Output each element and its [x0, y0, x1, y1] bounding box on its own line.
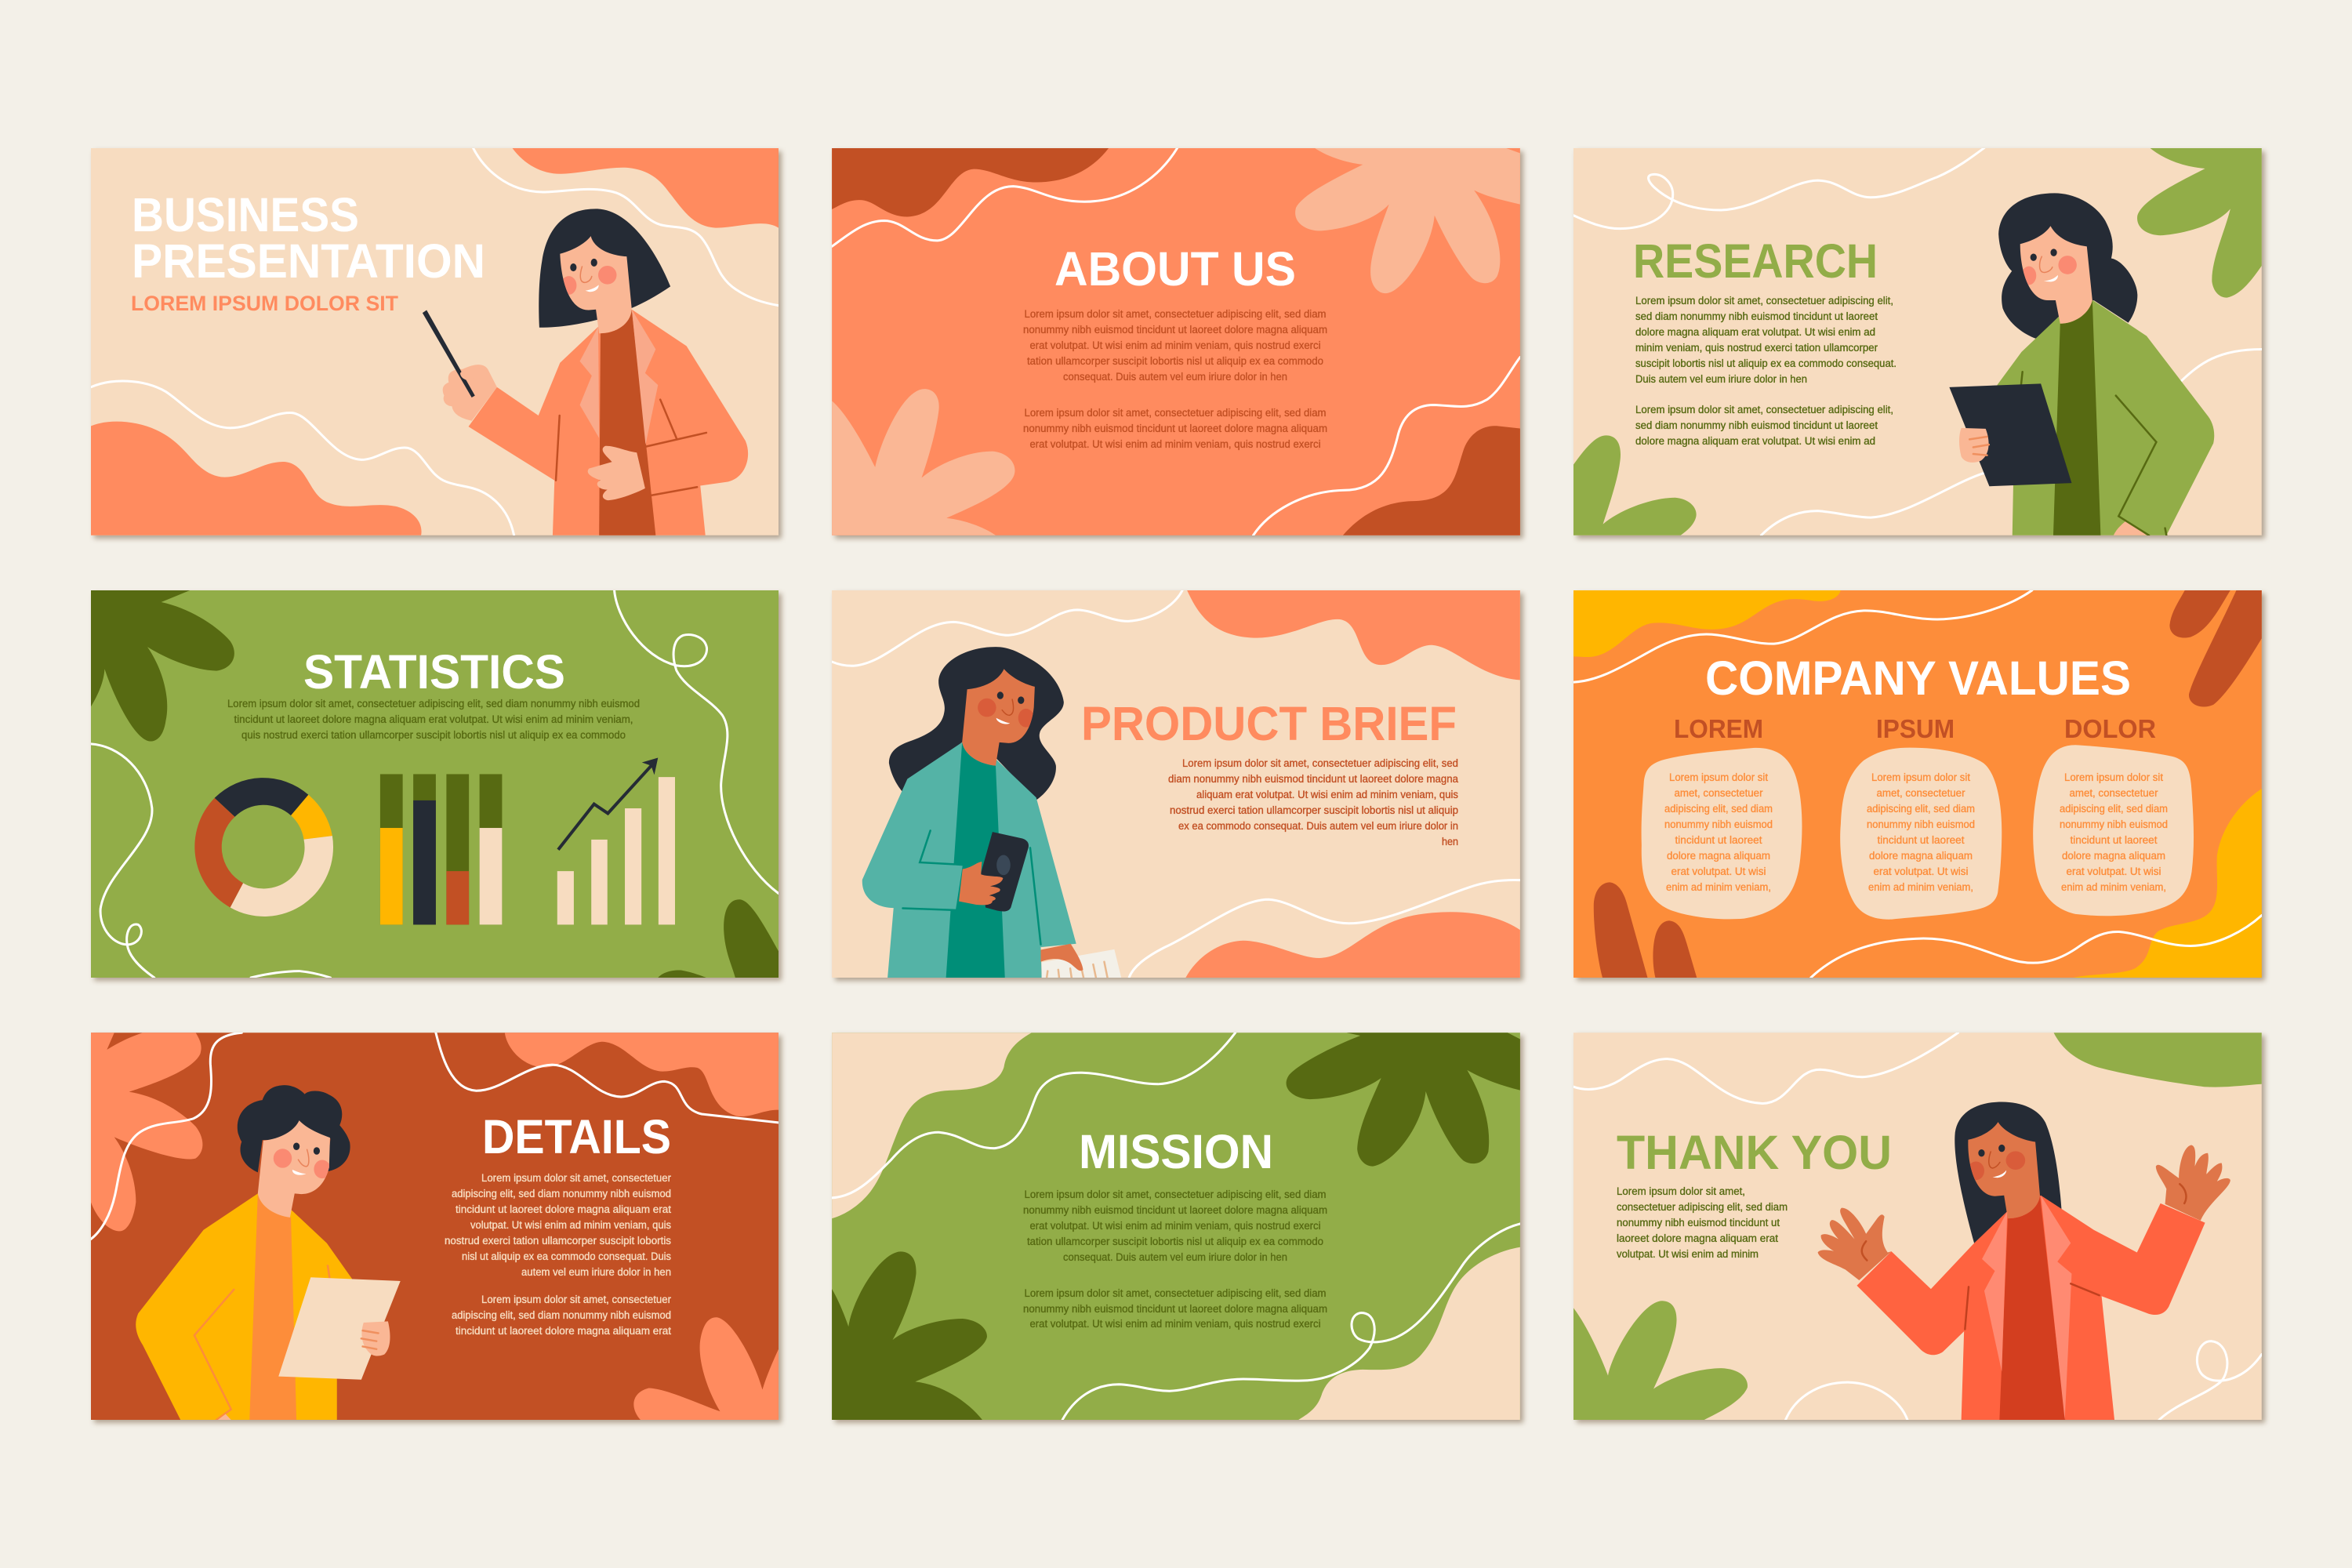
leaves: bottom left: [1594, 882, 1697, 978]
leaf: top left: [91, 590, 234, 742]
body text: diam nonummy nibh euismod tincidunt ut laoreet dolore magna: [1168, 773, 1458, 785]
column text: dolor: tincidunt ut laoreet: [2070, 834, 2158, 846]
title: research: RESEARCH: [1633, 234, 1878, 288]
body text: Lorem ipsum dolor sit amet, consectetuer adipiscing elit,: [1635, 404, 1893, 416]
blob: bottom left: [91, 422, 422, 535]
body text: hen: [1442, 836, 1458, 848]
body text: suscipit lobortis nisl ut aliquip ex ea commodo consequat.: [1635, 358, 1896, 369]
column text: ipsum: amet, consectetuer: [1877, 787, 1965, 799]
leaf: bottom left: [832, 389, 1014, 535]
panel: business presentation: [91, 148, 782, 539]
body text: tincidunt ut laoreet dolore magna aliquam erat: [456, 1325, 671, 1337]
chart: stacked bars: [380, 774, 502, 924]
arrow: upward trend: [558, 757, 658, 850]
body text: volutpat. Ut wisi enim ad minim: [1617, 1248, 1759, 1260]
column headings: [1674, 714, 2156, 743]
body text: [445, 1172, 671, 1337]
panel: product brief: [832, 590, 1523, 981]
title: details: DETAILS: [482, 1110, 671, 1163]
figure: person with paper: [136, 1085, 401, 1420]
body text: consequat. Duis autem vel eum iriure dolor in hen: [1063, 371, 1287, 383]
body text: sed diam nonummy nibh euismod tincidunt ut laoreet: [1635, 419, 1878, 431]
body text: [1617, 1185, 1788, 1260]
leaf: top right: [1287, 1033, 1520, 1167]
body text: Lorem ipsum dolor sit amet, consectetuer adipiscing elit, sed diam: [1024, 407, 1327, 419]
column text: lorem: tincidunt ut laoreet: [1675, 834, 1762, 846]
figure: presenter with pen: [423, 209, 748, 535]
column text: ipsum: tincidunt ut laoreet: [1877, 834, 1965, 846]
leaf: bottom right: [658, 899, 779, 978]
chart: growth bars: [557, 777, 675, 924]
column text: ipsum: [1867, 771, 1975, 893]
figure: woman with clipboard: [1949, 193, 2214, 535]
blob: bottom right: [2073, 789, 2262, 978]
leaf: bottom right: [633, 1317, 779, 1420]
column text: ipsum: erat volutpat. Ut wisi: [1874, 866, 1968, 877]
column text: dolor: dolore magna aliquam: [2062, 850, 2165, 862]
blob: bottom right: [1298, 1247, 1520, 1420]
leaf: top right: [1295, 148, 1520, 293]
panel: about us: [832, 148, 1523, 539]
column text: dolor: amet, consectetuer: [2070, 787, 2158, 799]
panel: statistics: [91, 590, 782, 981]
panel: research: [1573, 148, 2265, 539]
column text: lorem: amet, consectetuer: [1675, 787, 1763, 799]
column text: dolor: [2060, 771, 2168, 893]
title: mission: MISSION: [1079, 1125, 1273, 1178]
card: lorem background: [1642, 748, 1802, 919]
leaf: bottom left: [1573, 1301, 1748, 1420]
body text: erat volutpat. Ut wisi enim ad minim veniam, quis nostrud exerci: [1030, 1220, 1320, 1232]
body text: autem vel eum iriure dolor in hen: [521, 1266, 671, 1278]
body text: nisl ut aliquip ex ea commodo consequat. Duis: [462, 1250, 671, 1262]
body text: volutpat. Ut wisi enim ad minim veniam, quis: [470, 1219, 671, 1231]
body text: dolore magna aliquam erat volutpat. Ut wisi enim ad: [1635, 326, 1875, 338]
title: company values: COMPANY VALUES: [1705, 652, 2131, 705]
body text: ex ea commodo consequat. Duis autem vel eum iriure dolor in: [1178, 820, 1458, 832]
body text: consequat. Duis autem vel eum iriure dolor in hen: [1063, 1251, 1287, 1263]
column headings: LOREM: [1674, 714, 1763, 743]
leaf: top left: [91, 1033, 202, 1231]
body text: nonummy nibh euismod tincidunt ut laoreet dolore magna aliquam: [1023, 423, 1327, 434]
body text: tincidunt ut laoreet dolore magna aliquam erat: [456, 1203, 671, 1215]
body text: Lorem ipsum dolor sit amet, consectetuer adipiscing elit, sed: [1182, 757, 1458, 769]
body text: Lorem ipsum dolor sit amet,: [1617, 1185, 1745, 1197]
body text: Lorem ipsum dolor sit amet, consectetuer adipiscing elit, sed diam: [1024, 1287, 1327, 1299]
body text: [1168, 757, 1458, 848]
body text: Duis autem vel eum iriure dolor in hen: [1635, 373, 1807, 385]
column text: ipsum: enim ad minim veniam,: [1868, 881, 1973, 893]
blob: top left: [832, 148, 1109, 216]
card: dolor background: [2033, 745, 2194, 916]
column text: lorem: erat volutpat. Ut wisi: [1671, 866, 1766, 877]
body text: [227, 698, 640, 741]
column text: lorem: enim ad minim veniam,: [1666, 881, 1771, 893]
body text: nostrud exerci tation ullamcorper suscipit lobortis: [445, 1235, 671, 1247]
body text: adipiscing elit, sed diam nonummy nibh euismod: [452, 1309, 671, 1321]
body text: laoreet dolore magna aliquam erat: [1617, 1232, 1778, 1244]
chart: donut: [194, 778, 333, 916]
column text: ipsum: Lorem ipsum dolor sit: [1871, 771, 1970, 783]
body text: sed diam nonummy nibh euismod tincidunt ut laoreet: [1635, 310, 1878, 322]
body text: Lorem ipsum dolor sit amet, consectetuer: [481, 1294, 671, 1305]
figure: woman with phone: [862, 647, 1121, 978]
body text: adipiscing elit, sed diam nonummy nibh euismod: [452, 1188, 671, 1200]
column text: dolor: nonummy nibh euismod: [2060, 818, 2168, 830]
body text: erat volutpat. Ut wisi enim ad minim veniam, quis nostrud exerci: [1030, 1318, 1320, 1330]
title: business presentation: [135, 198, 483, 278]
leaf: bottom left: [832, 1251, 987, 1420]
body text: tincidunt ut laoreet dolore magna aliquam erat volutpat. Ut wisi enim ad minim veniam,: [234, 713, 633, 725]
column text: lorem: [1664, 771, 1773, 893]
column text: lorem: dolore magna aliquam: [1667, 850, 1770, 862]
column text: lorem: adipiscing elit, sed diam: [1664, 803, 1773, 815]
column text: ipsum: nonummy nibh euismod: [1867, 818, 1975, 830]
column text: dolor: Lorem ipsum dolor sit: [2064, 771, 2163, 783]
leaves: top right: [2169, 590, 2262, 707]
title: business presentation: PRESENTATION: [132, 234, 485, 288]
subtitle: LOREM IPSUM DOLOR SIT: [131, 292, 398, 315]
blob: top right: [1187, 590, 1520, 680]
body text: Lorem ipsum dolor sit amet, consectetuer: [481, 1172, 671, 1184]
body text: Lorem ipsum dolor sit amet, consectetuer adipiscing elit, sed diam: [1024, 308, 1327, 320]
panel: company values: [1573, 590, 2265, 981]
body text: nostrud exerci tation ullamcorper suscipit lobortis nisl ut aliquip: [1170, 804, 1458, 816]
body text: nonummy nibh euismod tincidunt ut laoreet dolore magna aliquam: [1023, 324, 1327, 336]
body text: Lorem ipsum dolor sit amet, consectetuer adipiscing elit, sed diam: [1024, 1189, 1327, 1200]
title: business presentation: BUSINESS: [132, 188, 359, 241]
column text: ipsum: dolore magna aliquam: [1869, 850, 1973, 862]
title: about us: ABOUT US: [1054, 242, 1296, 296]
column text: lorem: Lorem ipsum dolor sit: [1669, 771, 1768, 783]
body text: tation ullamcorper suscipit lobortis nisl ut aliquip ex ea commodo: [1027, 1236, 1323, 1247]
body text: nonummy nibh euismod tincidunt ut laoreet dolore magna aliquam: [1023, 1204, 1327, 1216]
column text: dolor: enim ad minim veniam,: [2061, 881, 2166, 893]
body text: tation ullamcorper suscipit lobortis nisl ut aliquip ex ea commodo: [1027, 355, 1323, 367]
body text: consectetuer adipiscing elit, sed diam: [1617, 1201, 1788, 1213]
panel: mission: [832, 1033, 1523, 1423]
body text: [1635, 295, 1896, 447]
body text: erat volutpat. Ut wisi enim ad minim veniam, quis nostrud exerci: [1030, 339, 1320, 351]
column text: dolor: erat volutpat. Ut wisi: [2067, 866, 2161, 877]
body text: nonummy nibh euismod tincidunt ut laoreet dolore magna aliquam: [1023, 1303, 1327, 1315]
figure: woman waving: [1818, 1102, 2230, 1420]
body text: dolore magna aliquam erat volutpat. Ut wisi enim ad: [1635, 435, 1875, 447]
leaf: top right: [2137, 148, 2262, 298]
panel: details: [91, 1033, 782, 1423]
blob: bottom right: [1185, 912, 1520, 978]
title: thank you: THANK YOU: [1617, 1126, 1892, 1179]
column headings: DOLOR: [2064, 714, 2156, 743]
blob: top left: [1573, 590, 1841, 657]
leaf: bottom left: [1573, 435, 1697, 535]
body text: nonummy nibh euismod tincidunt ut: [1617, 1217, 1780, 1229]
body text: minim veniam, quis nostrud exerci tation ullamcorper: [1635, 342, 1878, 354]
title: product brief: PRODUCT BRIEF: [1081, 697, 1457, 750]
column text: ipsum: adipiscing elit, sed diam: [1867, 803, 1975, 815]
body text: Lorem ipsum dolor sit amet, consectetuer adipiscing elit,: [1635, 295, 1893, 307]
column text: dolor: adipiscing elit, sed diam: [2060, 803, 2168, 815]
body text: [1023, 1189, 1327, 1330]
blob: bottom right: [1343, 426, 1520, 535]
body text: erat volutpat. Ut wisi enim ad minim veniam, quis nostrud exerci: [1030, 438, 1320, 450]
body text: [1023, 308, 1327, 450]
body text: aliquam erat volutpat. Ut wisi enim ad minim veniam, quis: [1196, 789, 1458, 800]
body text: Lorem ipsum dolor sit amet, consectetuer adipiscing elit, sed diam nonummy nibh euismod: [227, 698, 640, 710]
blob: top right: [505, 1033, 779, 1116]
body text: quis nostrud exerci tation ullamcorper suscipit lobortis nisl ut aliquip ex ea commodo: [241, 729, 626, 741]
blob: top right: [512, 148, 779, 228]
column text: lorem: nonummy nibh euismod: [1664, 818, 1773, 830]
blob: top left: [832, 1033, 1032, 1218]
card: ipsum background: [1840, 748, 2002, 920]
column headings: IPSUM: [1876, 714, 1955, 743]
panel: thank you: [1573, 1033, 2265, 1423]
title: statistics: STATISTICS: [303, 645, 565, 699]
blob: top right: [2054, 1033, 2262, 1087]
